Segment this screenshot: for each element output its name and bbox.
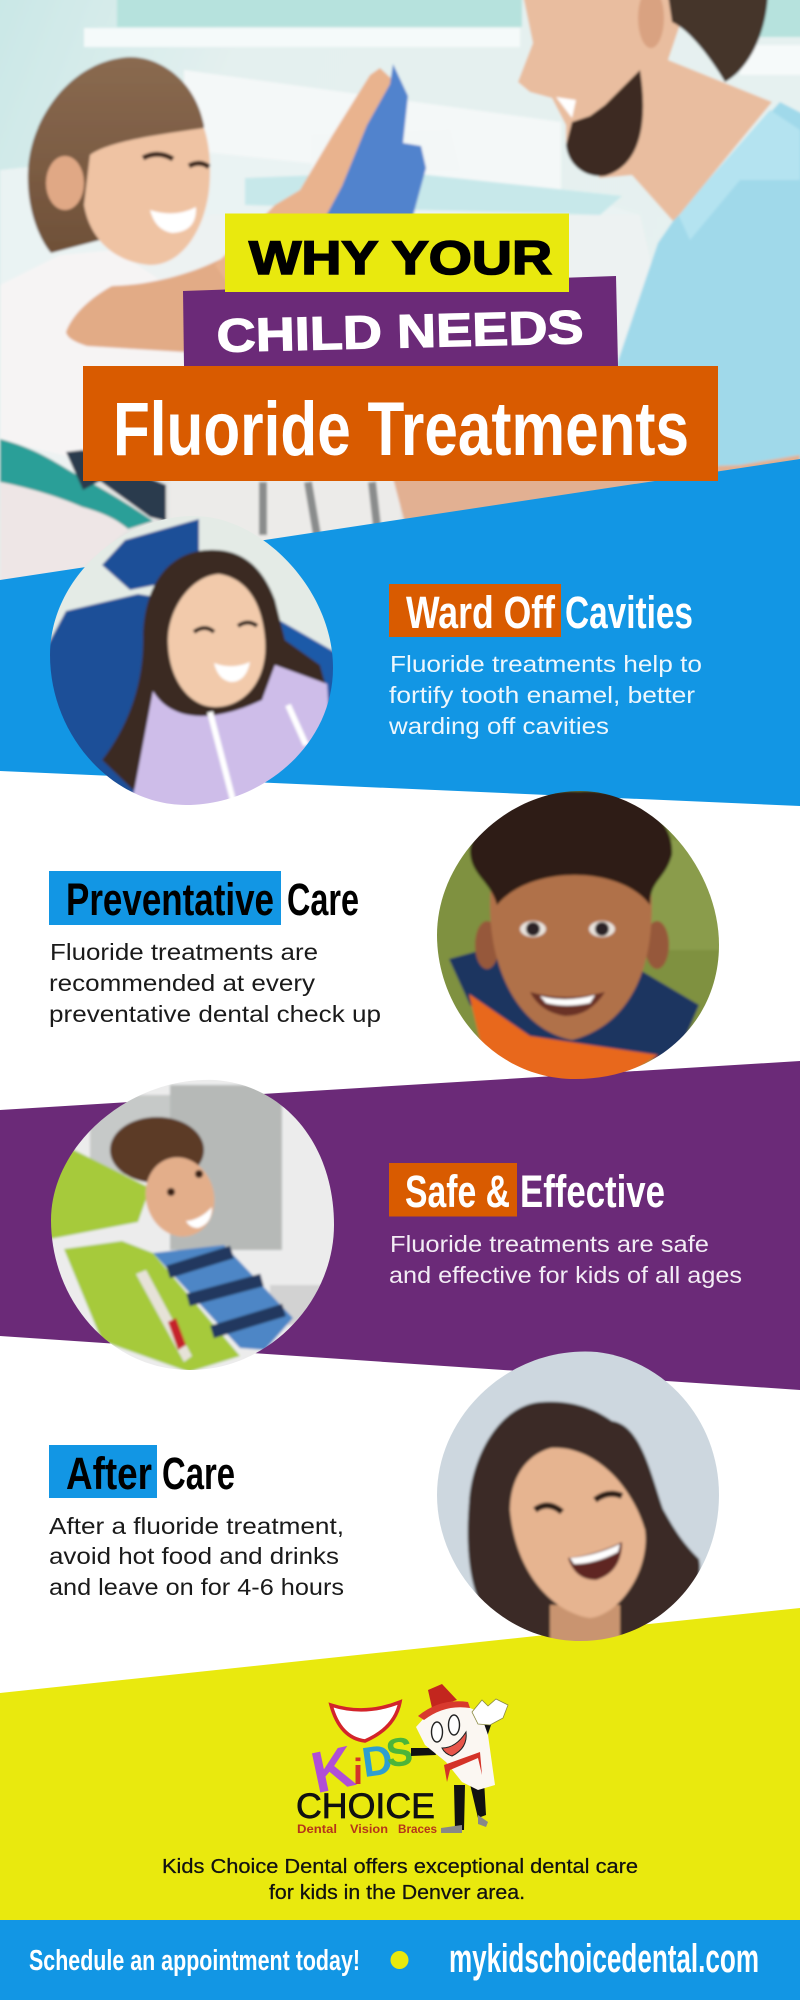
heading: Ward Off Cavities: Ward Off [406, 587, 556, 638]
face [510, 1448, 646, 1618]
girl hair [28, 57, 204, 253]
logo tagline [297, 1824, 437, 1836]
hair [110, 1117, 204, 1183]
hair [102, 550, 327, 790]
dentist hair [668, 0, 768, 82]
text: preventative care: preventative dental check up [49, 1001, 381, 1027]
title bar: yellow [225, 214, 569, 292]
dentist collar [678, 110, 800, 240]
photo: boy in green dental chair [45, 1072, 340, 1376]
title bar: purple [183, 276, 618, 366]
mouth [530, 992, 605, 1016]
text: after care [49, 1513, 344, 1600]
girl arm [64, 258, 225, 354]
sweater [153, 1245, 293, 1350]
face [137, 1150, 223, 1244]
heading: Preventative Care: Preventative [66, 874, 274, 925]
purple band [0, 1061, 800, 1390]
dentist beard [566, 70, 643, 176]
caption: Kids Choice Dental offers exceptional dental care [162, 1856, 638, 1878]
footer dot [390, 1951, 408, 1969]
chair headrest [45, 1146, 150, 1240]
text: safe and effective: Fluoride treatments are safe [390, 1231, 709, 1257]
mouth [568, 1542, 622, 1580]
title block [83, 214, 718, 481]
text: after care: avoid hot food and drinks [49, 1543, 339, 1569]
sink basin [245, 172, 622, 215]
smile [186, 1207, 212, 1228]
orange panel [469, 994, 658, 1085]
heading: Safe & Effective: Safe & [405, 1166, 510, 1217]
text: preventative care [49, 939, 381, 1027]
heading: Ward Off Cavities: Cavities [565, 587, 693, 638]
girl forearm and hand [222, 67, 392, 260]
hoodie strings [210, 705, 306, 808]
chair headrest [102, 519, 199, 590]
heading: Safe & Effective: Effective [520, 1166, 665, 1217]
mascot legs [454, 1780, 486, 1830]
chair strip [136, 1270, 192, 1362]
heading: Preventative Care: Care [287, 874, 359, 925]
mascot hand [472, 1699, 508, 1725]
title line 2: CHILD NEEDS [216, 300, 584, 362]
caption [162, 1856, 638, 1904]
face [168, 574, 265, 707]
title bar: orange [83, 366, 718, 481]
photo: girl in lavender hoodie [45, 510, 340, 810]
logo tagline: Dental [297, 1824, 337, 1836]
heading: Safe & Effective [389, 1163, 665, 1217]
dentist shirt [617, 102, 800, 480]
yellow band [0, 1608, 800, 1920]
text: ward off cavities: fortify tooth enamel, better [389, 682, 695, 708]
heading: Ward Off Cavities [389, 584, 693, 638]
logo tagline: Braces [398, 1824, 437, 1836]
sweater stripes [168, 1252, 284, 1332]
mascot shoes [441, 1815, 488, 1833]
girl shirt [0, 252, 184, 454]
shirt [449, 945, 699, 1060]
text: ward off cavities: Fluoride treatments help to [390, 651, 702, 677]
blue band [0, 459, 800, 806]
text: ward off cavities: warding off cavities [388, 713, 609, 739]
hair [470, 791, 672, 905]
background panel [170, 1085, 282, 1250]
text: preventative care: Fluoride treatments are [50, 939, 318, 965]
chair back [64, 1241, 240, 1372]
dentist mouth [556, 97, 576, 118]
hoodie [130, 665, 330, 810]
photo: smiling boy [430, 785, 725, 1085]
logo mascot tooth [411, 1684, 508, 1833]
hair [468, 1402, 700, 1650]
logo word KiDS [306, 1730, 415, 1806]
heading: After Care: After [66, 1448, 152, 1499]
jeans [66, 450, 166, 521]
text: safe and effective [389, 1231, 742, 1288]
blue glove [326, 64, 426, 216]
logo word KiDS: D [359, 1735, 396, 1786]
heading: After Care: Care [162, 1448, 235, 1499]
girl face [84, 128, 210, 265]
title line 1: WHY YOUR [249, 231, 552, 284]
text: safe and effective: and effective for kids of all ages [389, 1262, 742, 1288]
eyes [194, 622, 257, 632]
caption: for kids in the Denver area. [269, 1882, 525, 1904]
neck [550, 1605, 620, 1645]
dentist ear [638, 0, 664, 48]
logo word KiDS: i [353, 1751, 363, 1792]
heading: After Care [49, 1445, 235, 1499]
chair arm [0, 439, 153, 529]
eyes [167, 1188, 175, 1196]
chair white cushion [0, 482, 128, 583]
text: after care: After a fluoride treatment, [49, 1513, 344, 1539]
footer call to action: Schedule an appointment today! [29, 1945, 360, 1977]
text: preventative care: recommended at every [49, 970, 316, 996]
eyes [520, 921, 546, 937]
logo word KiDS: K [306, 1734, 360, 1806]
logo word KiDS: S [384, 1730, 415, 1776]
mascot strap [444, 1752, 482, 1782]
footer band [0, 1920, 800, 2000]
dentist head and neck [518, 0, 772, 221]
logo: Kids Choice Dental [296, 1684, 508, 1836]
eyes [535, 1494, 622, 1512]
mascot eyes [432, 1722, 442, 1742]
chair back [50, 592, 152, 794]
mascot tooth body [416, 1706, 495, 1790]
mascot mouth [442, 1732, 466, 1756]
mascot arms [411, 1718, 492, 1756]
hero photo: dentist high-fiving girl [0, 0, 800, 605]
girl smile [150, 207, 196, 233]
logo word CHOICE: CHOICE [296, 1787, 435, 1826]
photo: laughing girl with long hair [430, 1345, 725, 1650]
cables [263, 482, 378, 535]
text: after care: and leave on for 4-6 hours [49, 1574, 344, 1600]
dentist forearm [392, 454, 800, 519]
logo smile [331, 1702, 400, 1741]
smile [214, 662, 250, 682]
mascot hat [428, 1684, 457, 1708]
face [490, 856, 652, 1040]
text: ward off cavities [388, 651, 702, 739]
girl eyes [143, 154, 209, 167]
logo tagline: Vision [350, 1824, 388, 1836]
ears [475, 921, 499, 969]
girl ear [46, 156, 84, 210]
